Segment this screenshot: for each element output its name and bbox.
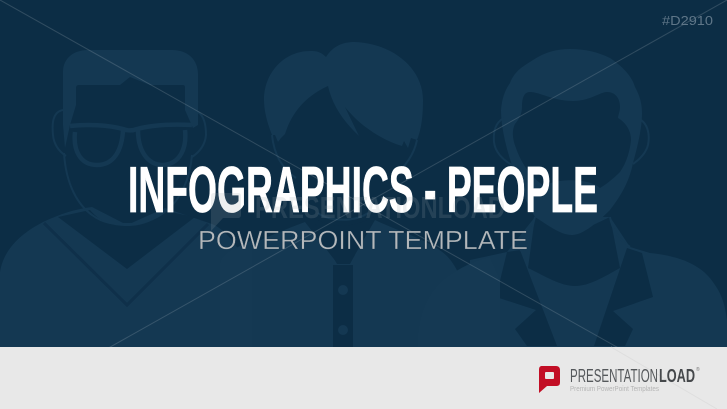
logo: PresentationLoad: Premium PowerPoint Templates [570,386,659,393]
logo: PresentationLoad: LOAD [659,366,695,386]
person: man with beard and suit [470,49,727,347]
person: woman with fringe [220,42,470,347]
person: man with glasses [0,50,245,347]
document code: #D2910 [662,13,713,28]
watermark logo [211,190,505,231]
logo: PresentationLoad [539,366,700,393]
overlap shading between figures [220,240,500,347]
subtitle: POWERPOINT TEMPLATE [198,225,528,255]
watermark logo: PRESENTATIONLOAD [255,190,505,225]
logo: PresentationLoad: ® [696,366,700,373]
footer bar [0,347,727,409]
logo: PresentationLoad: PRESENTATION [570,366,658,386]
